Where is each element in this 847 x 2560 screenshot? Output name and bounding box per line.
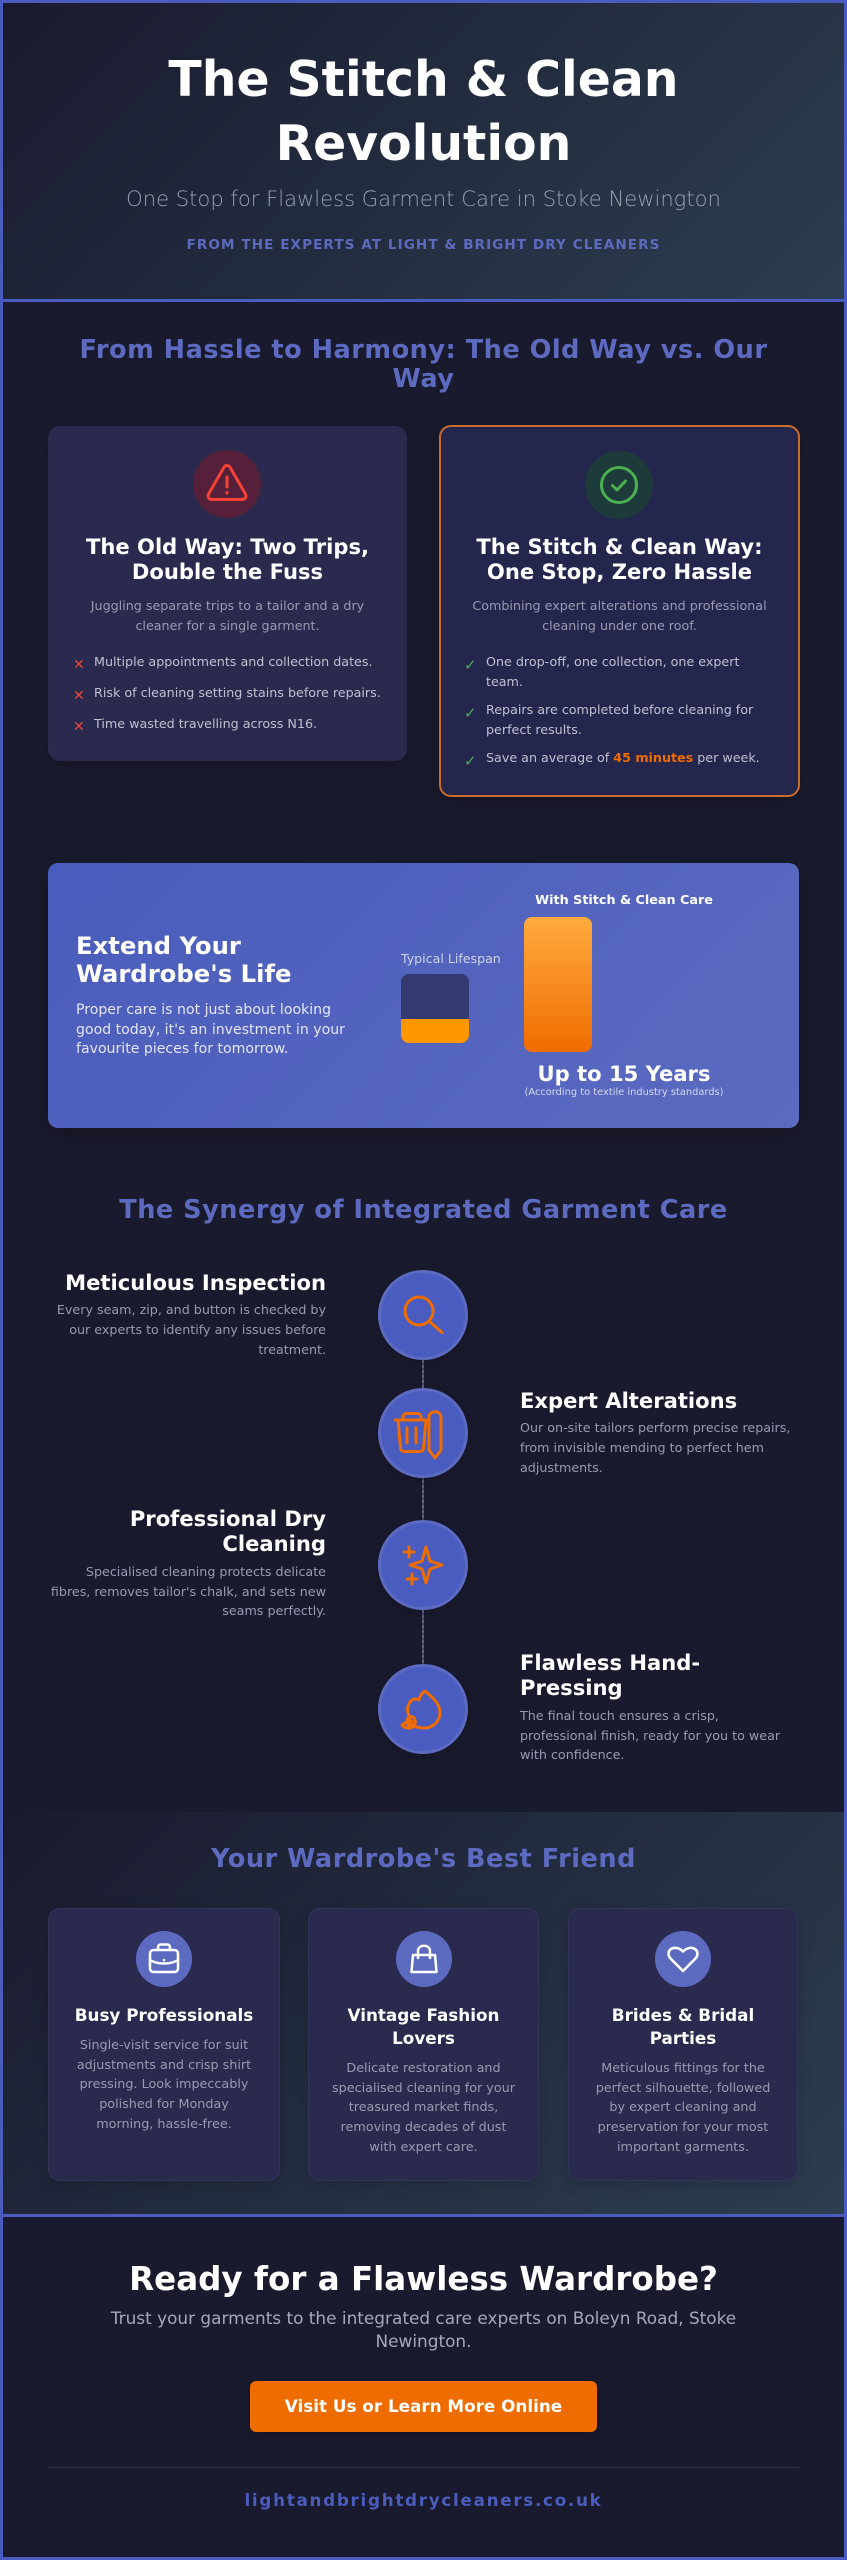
card heading: The Old Way: Two Trips,	[86, 534, 369, 559]
chart: with stitch and clean care	[524, 893, 723, 1098]
list item: Repairs are completed before cleaning for	[486, 702, 753, 717]
card text: perfect silhouette, followed	[596, 2081, 770, 2096]
card description: cleaning under one roof.	[542, 618, 697, 633]
step: inspection text	[57, 1270, 326, 1357]
icon: heart	[655, 1931, 711, 1987]
icon: briefcase	[136, 1931, 192, 1987]
step text: our experts to identify any issues before	[69, 1322, 326, 1337]
stat value: Up to 15 Years	[537, 1061, 711, 1086]
card text: Single-visit service for suit	[80, 2038, 248, 2053]
step text	[520, 1420, 790, 1475]
stat source: (According to textile industry standards)	[525, 1087, 723, 1098]
list item: ✓	[464, 656, 477, 674]
section heading: Your Wardrobe's Best Friend	[211, 1844, 636, 1874]
panel: synergy timeline	[51, 1195, 790, 1762]
card heading	[612, 2005, 754, 2048]
cta button: Visit Us or Learn More Online	[285, 2396, 562, 2416]
list item: ✓	[464, 752, 477, 770]
icon: warning triangle	[193, 450, 261, 518]
step text: Every seam, zip, and button is checked by	[57, 1302, 326, 1317]
cta text: Newington.	[376, 2331, 472, 2351]
subtitle: One Stop for Flawless Garment Care in Stoke Newington	[126, 186, 721, 211]
bar: extended	[524, 917, 592, 1052]
step heading	[130, 1506, 326, 1556]
card heading: Double the Fuss	[132, 559, 323, 584]
icon: bin and pencil	[378, 1388, 468, 1478]
banner text: good today, it's an investment in your	[76, 1022, 345, 1038]
card description: cleaner for a single garment.	[135, 618, 320, 633]
step text: treatment.	[258, 1342, 326, 1357]
step text: Our on-site tailors perform precise repairs,	[520, 1420, 790, 1435]
card description: Combining expert alterations and professional	[472, 598, 767, 613]
card text: morning, hassle-free.	[96, 2117, 232, 2132]
step text	[57, 1302, 326, 1357]
icon: shopping bag	[396, 1931, 452, 1987]
step text: professional finish, ready for you to wear	[520, 1728, 780, 1743]
bar: typical	[401, 974, 469, 1043]
card text: preservation for your most	[598, 2120, 768, 2135]
card heading: Vintage Fashion	[348, 2005, 499, 2025]
cta text: Trust your garments to the integrated care experts on Boleyn Road, Stoke	[111, 2308, 736, 2328]
section heading	[80, 335, 767, 394]
section heading: Way	[392, 364, 454, 394]
list item: ✓	[464, 704, 477, 722]
chart label: With Stitch & Clean Care	[535, 893, 713, 908]
card heading	[86, 534, 369, 584]
card text: adjustments and crisp shirt	[77, 2058, 251, 2073]
chart: typical lifespan	[400, 951, 501, 1043]
card text: treasured market finds,	[349, 2100, 498, 2115]
card heading: Busy Professionals	[75, 2005, 253, 2025]
banner text: Proper care is not just about looking	[76, 1002, 331, 1018]
card: old way	[48, 426, 407, 761]
list item: One drop-off, one collection, one expert	[486, 654, 739, 669]
step text: fibres, removes tailor's chalk, and sets new	[51, 1584, 326, 1599]
list item: ✕	[73, 688, 85, 704]
card heading: Parties	[650, 2028, 716, 2048]
banner text: favourite pieces for tomorrow.	[76, 1041, 288, 1057]
icon: check circle	[585, 451, 653, 519]
list item	[464, 654, 740, 689]
list item: perfect results.	[486, 722, 582, 737]
card: brides	[568, 1908, 798, 2181]
chart label: Typical Lifespan	[401, 951, 501, 966]
step text	[51, 1564, 326, 1618]
list item	[464, 702, 754, 737]
step: pressing text	[520, 1650, 780, 1762]
card description	[90, 598, 364, 633]
card heading	[348, 2005, 499, 2048]
step text	[520, 1708, 780, 1762]
card description: Juggling separate trips to a tailor and a dry	[91, 598, 364, 613]
list item: Time wasted travelling across N16.	[94, 716, 317, 731]
card text	[332, 2061, 515, 2155]
step heading: Expert Alterations	[520, 1388, 737, 1413]
panel: old way vs our way	[48, 335, 800, 797]
icon: flame	[378, 1664, 468, 1754]
step heading: Flawless Hand-	[520, 1650, 700, 1675]
section heading: The Synergy of Integrated Garment Care	[119, 1195, 728, 1225]
step heading	[520, 1650, 700, 1700]
card text: Meticulous fittings for the	[601, 2061, 765, 2076]
card heading	[476, 534, 763, 584]
banner heading: Extend Your	[76, 931, 241, 960]
card text	[77, 2038, 251, 2132]
icon: search	[378, 1270, 468, 1360]
banner heading	[76, 931, 291, 988]
card: professionals	[48, 1908, 280, 2181]
icon: sparkles	[378, 1520, 468, 1610]
card text: removing decades of dust	[341, 2120, 506, 2135]
panel: audience	[0, 1812, 847, 2217]
attribution: FROM THE EXPERTS AT LIGHT & BRIGHT DRY CLEANERS	[187, 237, 660, 253]
banner heading: Wardrobe's Life	[76, 959, 291, 988]
header	[0, 0, 847, 302]
title: Revolution	[276, 115, 571, 172]
step: dry cleaning text	[51, 1506, 326, 1618]
list item: Save an average of 45 minutes per week.	[486, 750, 760, 765]
card: stitch and clean way	[439, 425, 800, 797]
list item: Multiple appointments and collection dates.	[94, 654, 372, 669]
step text: adjustments.	[520, 1460, 603, 1475]
step text: Specialised cleaning protects delicate	[86, 1564, 326, 1579]
card text: with expert care.	[369, 2140, 478, 2155]
step heading: Pressing	[520, 1675, 623, 1700]
section heading: From Hassle to Harmony: The Old Way vs. Our	[80, 335, 767, 365]
step text: with confidence.	[520, 1747, 624, 1762]
card text: Delicate restoration and	[346, 2061, 501, 2076]
step text: The final touch ensures a crisp,	[520, 1708, 719, 1723]
card heading: The Stitch & Clean Way:	[476, 534, 763, 559]
card heading: One Stop, Zero Hassle	[487, 559, 752, 584]
step text: from invisible mending to perfect hem	[520, 1440, 764, 1455]
card text	[596, 2061, 770, 2155]
step: alterations text	[520, 1388, 790, 1475]
step heading: Cleaning	[222, 1531, 326, 1556]
list item: team.	[486, 674, 523, 689]
card text: pressing. Look impeccably	[80, 2077, 248, 2092]
banner text	[76, 1002, 345, 1057]
step text: seams perfectly.	[222, 1603, 326, 1618]
card description	[472, 598, 767, 633]
card text: by expert cleaning and	[609, 2100, 757, 2115]
card text: specialised cleaning for your	[332, 2081, 515, 2096]
list item	[464, 750, 760, 770]
list item: Risk of cleaning setting stains before repairs.	[94, 685, 381, 700]
title: The Stitch & Clean	[168, 51, 679, 108]
card: vintage lovers	[308, 1908, 539, 2181]
card heading: Brides & Bridal	[612, 2005, 754, 2025]
card text: polished for Monday	[99, 2097, 229, 2112]
panel: lifespan banner	[48, 863, 799, 1128]
card text: important garments.	[617, 2140, 749, 2155]
list item: ✕	[73, 657, 85, 673]
cta button	[250, 2381, 597, 2432]
list item: ✕	[73, 719, 85, 735]
cta heading: Ready for a Flawless Wardrobe?	[129, 2260, 718, 2298]
website url: lightandbrightdrycleaners.co.uk	[244, 2490, 603, 2510]
panel: call to action	[48, 2260, 799, 2510]
title	[168, 51, 679, 172]
step heading: Meticulous Inspection	[65, 1270, 326, 1295]
card heading: Lovers	[392, 2028, 455, 2048]
step heading: Professional Dry	[130, 1506, 326, 1531]
cta text	[110, 2308, 736, 2351]
